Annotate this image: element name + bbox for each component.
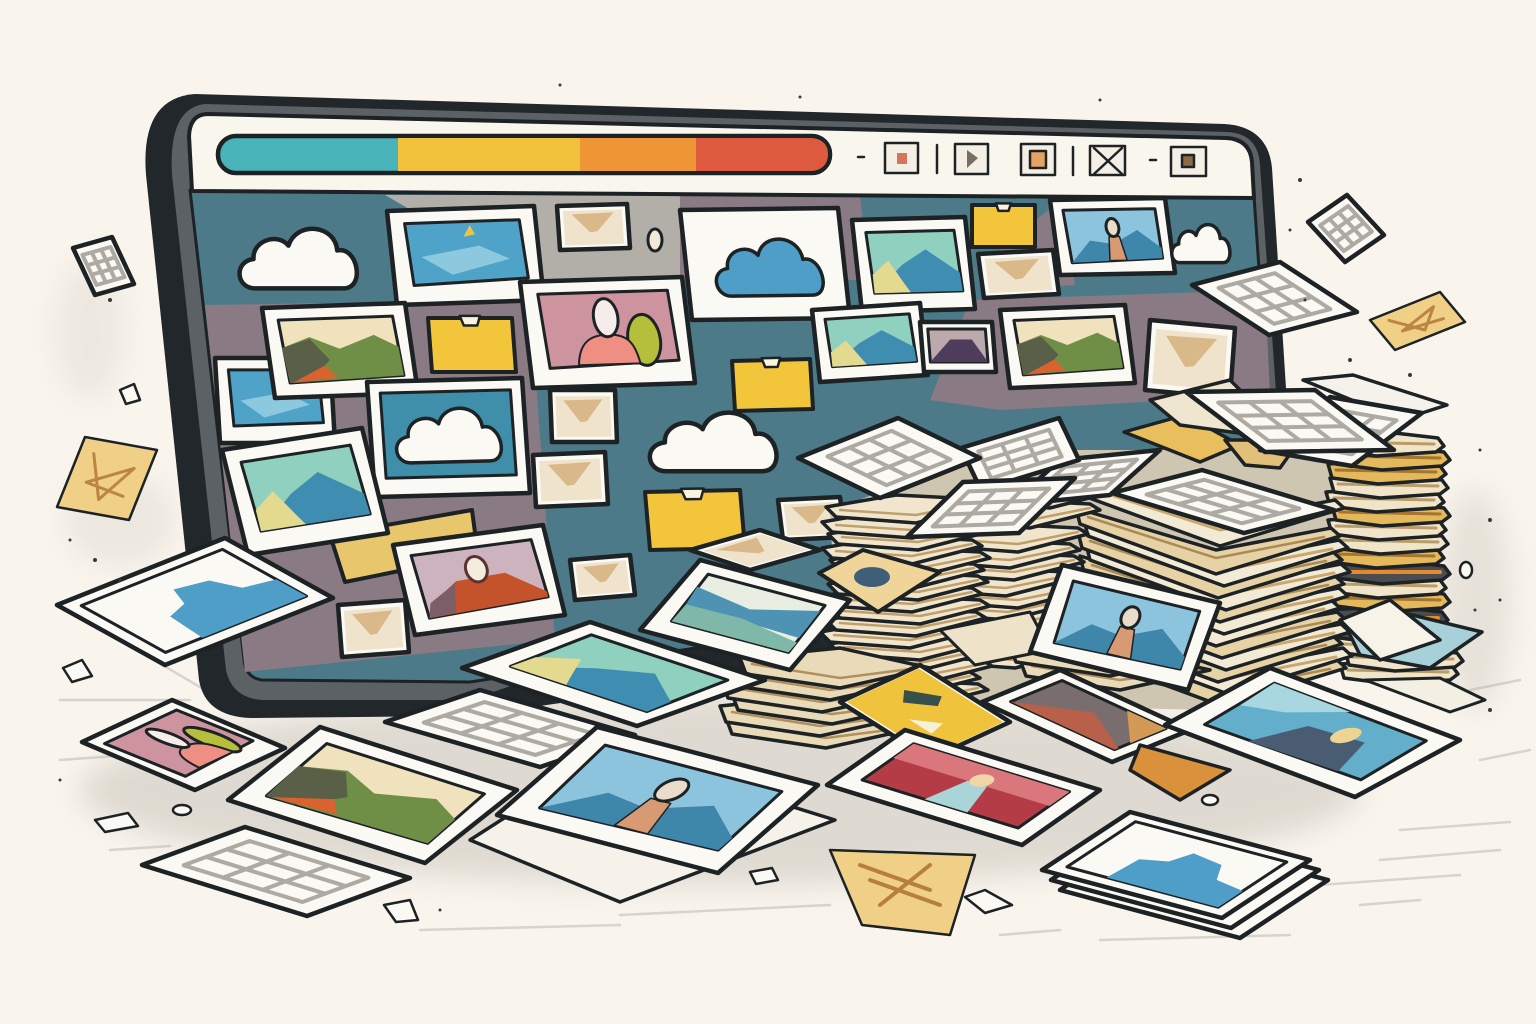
grid sheet center (907, 478, 1075, 537)
foreground scattered photos (82, 560, 1460, 938)
tablet screen (190, 190, 1280, 682)
beige grid sheet back (1010, 450, 1160, 505)
small beige card (550, 390, 617, 442)
ground shadow smudges (55, 260, 1510, 885)
window title bar (189, 114, 1254, 198)
center paper stack (1076, 480, 1352, 706)
floating cloud photo (57, 538, 333, 665)
blue figure card (1165, 668, 1460, 797)
photo: teal mountains (222, 428, 388, 555)
sticky note left (57, 437, 157, 520)
grid sheet large center (1112, 470, 1334, 533)
beige photo right (1145, 320, 1235, 398)
colored progress bar (218, 136, 830, 173)
yellow folder (428, 316, 516, 372)
navy spot sheet (819, 550, 940, 612)
bottom left grid (142, 827, 410, 916)
tinted sheet at top (1303, 375, 1447, 420)
screen mauve patches (205, 195, 1270, 672)
grid sheet (798, 418, 980, 498)
orange card edge (1130, 745, 1230, 800)
cloud card bottom right (1042, 812, 1310, 918)
cloud card (680, 208, 850, 320)
screen grey wash (385, 195, 680, 285)
floating sheets (57, 195, 1465, 520)
photo: portrait (1050, 198, 1175, 275)
small note top left (73, 237, 134, 295)
cloud on blue card (367, 378, 530, 497)
beige small card (570, 555, 635, 600)
small beige card (557, 204, 630, 250)
photo: green hills (262, 303, 418, 398)
photo stack blue (462, 622, 765, 726)
cloud card stack under sheet (1051, 822, 1319, 928)
screen thumbnails (215, 198, 1235, 657)
mountain card (640, 560, 850, 670)
oval chip (648, 229, 662, 251)
yellow folder middle (732, 357, 813, 411)
small beige card by cloud (778, 497, 845, 540)
green big card (228, 727, 517, 863)
grid sheet falling (1192, 262, 1357, 335)
pile backing shadow (830, 450, 1340, 710)
ink speckles (58, 84, 1502, 912)
rear grid sheet (1260, 397, 1422, 466)
tan folder (330, 510, 478, 582)
grid sheet under stack (385, 690, 635, 767)
portrait blue card (497, 727, 818, 873)
photo: left partial blue (215, 358, 335, 443)
beige sheet (690, 530, 820, 570)
sticky note right (1370, 292, 1465, 350)
photo: teal hills (852, 217, 975, 312)
note scribble (860, 865, 940, 905)
dark card (982, 670, 1190, 762)
pile top sheets (690, 375, 1447, 690)
window control icons (858, 143, 1206, 176)
yellow folder bottom (645, 488, 745, 550)
beige card (978, 250, 1059, 298)
grid sheet top stack (1186, 390, 1394, 452)
lower paper stack (720, 636, 1210, 748)
photo: green (1000, 305, 1135, 388)
gold loose sheets on pile (1124, 380, 1300, 468)
navy spot (854, 567, 890, 587)
white cloud left (240, 229, 357, 288)
tablet inner bezel (172, 104, 1278, 700)
photo: purple (920, 322, 996, 372)
crimson figure card (827, 730, 1100, 845)
yellow folder (972, 203, 1035, 247)
debris scraps (63, 384, 1472, 922)
small grid sheet (1308, 195, 1384, 262)
pink small card (82, 700, 285, 790)
right paper column (1326, 432, 1463, 684)
photo: portrait red (393, 525, 565, 635)
cloud card stack under sheet 2 (1060, 832, 1328, 938)
portrait card upright (1030, 565, 1220, 690)
sheets under portrait (470, 750, 835, 902)
photo: pale (812, 303, 928, 382)
grid sheet (961, 418, 1079, 490)
yellow tilted card (840, 665, 1010, 759)
white cloud center (650, 413, 776, 471)
bottom right loose sheets (1340, 600, 1485, 712)
photo: small figure (533, 452, 608, 507)
ground scuff lines (60, 640, 1530, 940)
beige small card (338, 600, 409, 657)
tablet outer frame (145, 94, 1288, 718)
beige note on stack (940, 612, 1050, 665)
sticky note bottom (830, 850, 975, 935)
photo: pink portrait (520, 277, 695, 388)
photo: blue lake (387, 206, 544, 305)
white cloud right (1172, 225, 1230, 263)
tablet device (145, 94, 1288, 718)
middle paper stack (820, 480, 1120, 708)
